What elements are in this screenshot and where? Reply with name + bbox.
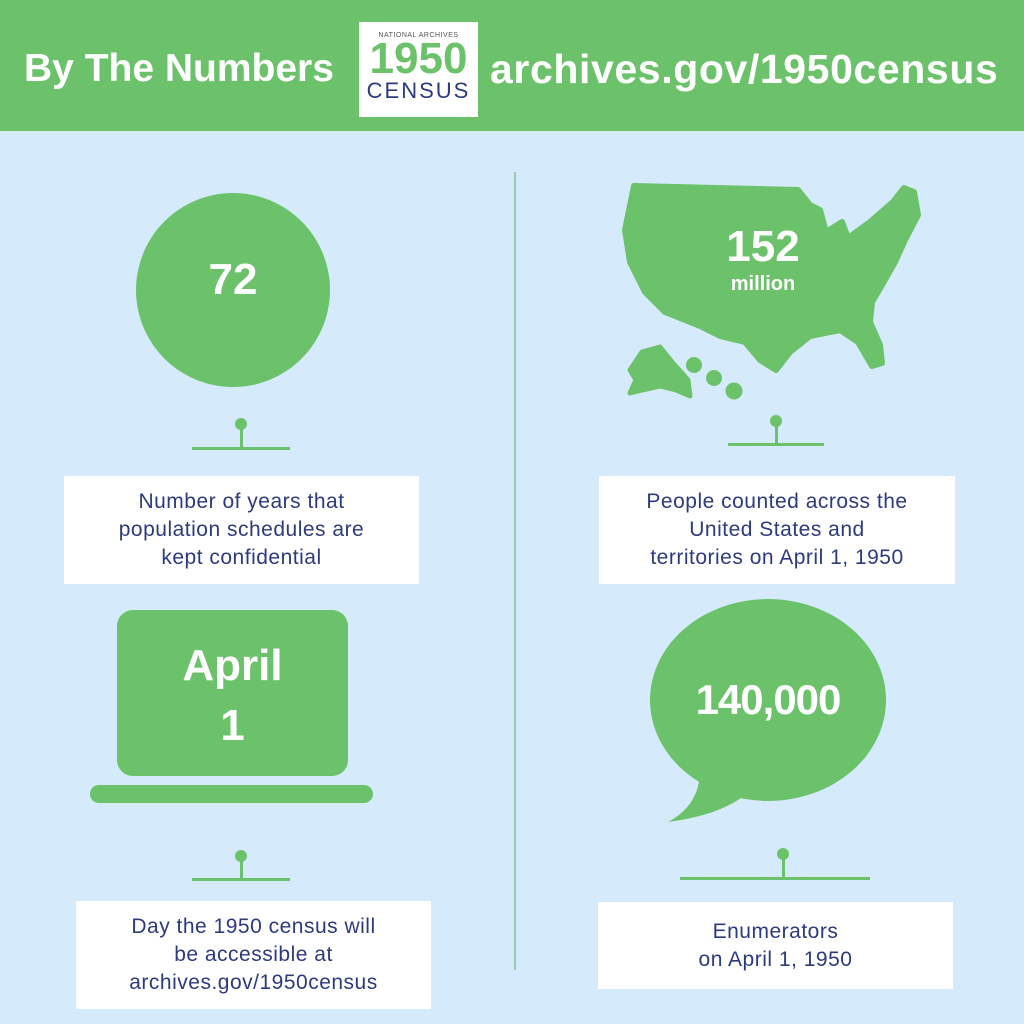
- circle with number: 72: [209, 255, 257, 304]
- panel: 72: [64, 193, 419, 584]
- logo: [359, 22, 478, 117]
- pin marker: [680, 848, 870, 880]
- icon: speech bubble: [650, 599, 886, 822]
- header bar: [0, 0, 1024, 131]
- panel: April 1: [76, 610, 431, 1009]
- text block: [76, 901, 431, 1009]
- panel: 140,000: [598, 599, 953, 989]
- text block: Number of years that: [138, 490, 345, 513]
- logo: NATIONAL ARCHIVES: [378, 32, 459, 39]
- number: [726, 222, 800, 295]
- pin marker: [192, 418, 290, 450]
- pin marker: [728, 415, 824, 446]
- logo: 1950: [370, 34, 467, 83]
- text block: territories on April 1, 1950: [650, 546, 904, 569]
- text block: United States and: [689, 518, 865, 541]
- icon: laptop with date: [90, 610, 373, 803]
- text block: kept confidential: [161, 546, 322, 569]
- center divider: [514, 172, 516, 970]
- text block: be accessible at: [174, 943, 333, 966]
- number: million: [731, 273, 795, 295]
- text block: People counted across the: [646, 490, 908, 513]
- icon: US map: [622, 183, 921, 400]
- text block: [599, 476, 955, 584]
- panel: 152 million: [599, 183, 955, 584]
- number: 152: [726, 222, 800, 271]
- text block: archives.gov/1950census: [129, 971, 378, 994]
- pin marker: [192, 850, 290, 881]
- icon: laptop with date: 1: [220, 701, 245, 750]
- circle with number: [136, 193, 330, 387]
- title: By The Numbers: [24, 47, 334, 90]
- text block: population schedules are: [119, 518, 364, 541]
- website url: archives.gov/1950census: [490, 46, 998, 92]
- icon: laptop with date: April: [182, 641, 283, 690]
- text block: Day the 1950 census will: [131, 915, 376, 938]
- text block: [64, 476, 419, 584]
- number: 140,000: [696, 676, 840, 723]
- logo: CENSUS: [367, 78, 470, 103]
- text block: [598, 902, 953, 989]
- text block: on April 1, 1950: [699, 948, 852, 970]
- text block: Enumerators: [713, 920, 838, 942]
